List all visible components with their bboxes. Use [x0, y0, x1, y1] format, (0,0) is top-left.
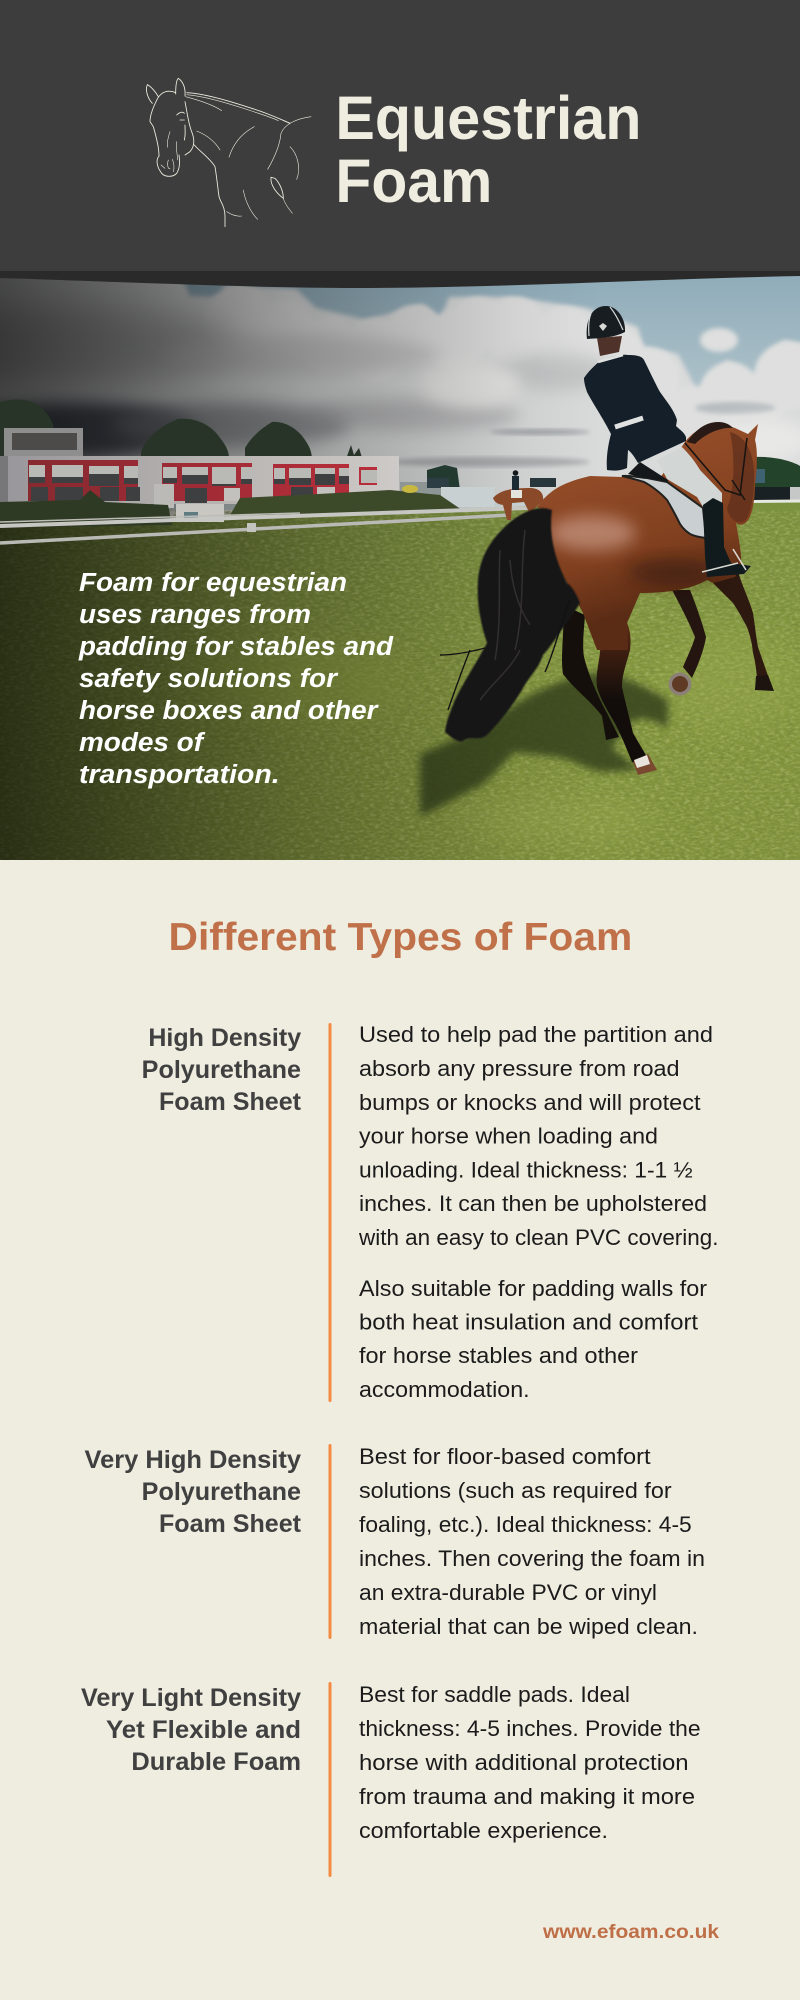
saddle	[628, 462, 668, 482]
belly shading	[628, 558, 716, 586]
description: Best for floor-based comfort	[359, 1444, 651, 1469]
label	[84, 1446, 302, 1538]
divider bar	[328, 1023, 332, 1402]
hoof	[633, 754, 657, 775]
description: both heat insulation and comfort	[359, 1310, 698, 1334]
title	[335, 84, 641, 215]
red and white building	[0, 428, 399, 508]
stirrup	[702, 549, 746, 572]
description: comfortable experience.	[359, 1818, 608, 1843]
description	[358, 1022, 718, 1402]
description: for horse stables and other	[359, 1343, 638, 1368]
grass light and dark patches	[242, 645, 784, 838]
hedges and shrubs	[0, 485, 462, 528]
horse body	[537, 424, 758, 650]
panel: high density polyurethane foam sheet	[142, 1022, 718, 1402]
intro text over photo: transportation.	[79, 761, 280, 789]
description: from trauma and making it more	[359, 1784, 695, 1809]
panel: very high density polyurethane foam sheet	[84, 1444, 705, 1639]
description: thickness: 4-5 inches. Provide the	[359, 1716, 701, 1741]
far front leg	[668, 590, 706, 696]
neck and hair	[597, 336, 622, 356]
riding helmet	[587, 306, 625, 339]
jacket collar and belt	[598, 355, 623, 362]
riding jacket	[584, 355, 686, 471]
label: Foam Sheet	[159, 1088, 302, 1116]
divider bar	[328, 1444, 332, 1639]
fences	[0, 501, 800, 543]
hero photo: rider on horse in a dressage arena	[0, 262, 800, 860]
bridle and reins	[685, 438, 747, 500]
label: Polyurethane	[142, 1056, 301, 1084]
label	[81, 1684, 301, 1776]
near front leg	[713, 574, 768, 690]
description: Also suitable for padding walls for	[359, 1276, 707, 1301]
intro text over photo	[78, 569, 395, 789]
distant rider	[493, 470, 543, 520]
dark gradient overlay	[0, 278, 539, 860]
horse shadow	[420, 672, 668, 816]
intro text over photo: safety solutions for	[79, 665, 339, 693]
divider bar	[328, 1682, 332, 1877]
background trees	[0, 400, 800, 490]
description: horse with additional protection	[359, 1750, 689, 1775]
intro text over photo: modes of	[79, 729, 206, 757]
near hind leg	[596, 618, 646, 763]
intro text over photo: uses ranges from	[79, 601, 311, 629]
far hind leg	[562, 605, 619, 740]
description: absorb any pressure from road	[359, 1056, 680, 1081]
description	[359, 1682, 701, 1843]
description: accommodation.	[359, 1377, 530, 1402]
footer website link: www.efoam.co.uk	[542, 1921, 719, 1943]
intro text over photo: Foam for equestrian	[79, 569, 347, 597]
label: Polyurethane	[142, 1478, 301, 1506]
breeches	[657, 447, 722, 507]
intro text over photo: padding for stables and	[78, 633, 395, 661]
description: your horse when loading and	[359, 1124, 658, 1148]
description: inches. It can then be upholstered	[359, 1191, 707, 1216]
description: bumps or knocks and will protect	[359, 1090, 701, 1115]
description: unloading. Ideal thickness: 1-1 ½	[359, 1158, 693, 1182]
saddle pad	[622, 476, 706, 538]
title: Foam	[335, 147, 492, 215]
description: with an easy to clean PVC covering.	[358, 1225, 718, 1250]
label: Very Light Density	[81, 1684, 301, 1712]
icon: horse line drawing	[146, 78, 311, 227]
description	[359, 1444, 705, 1639]
description: solutions (such as required for	[359, 1478, 672, 1503]
curved shadow strip	[0, 270, 800, 288]
description: Best for saddle pads. Ideal	[359, 1682, 630, 1707]
description: foaling, etc.). Ideal thickness: 4-5	[359, 1512, 692, 1537]
label: Durable Foam	[131, 1748, 301, 1776]
heading: Different Types of Foam: Different Types of Foam	[168, 916, 632, 959]
horse head shading	[727, 432, 754, 522]
horse tail	[440, 508, 580, 741]
clouds	[0, 262, 800, 500]
title: Equestrian	[335, 84, 641, 152]
label: Foam Sheet	[159, 1510, 302, 1538]
description: inches. Then covering the foam in	[359, 1546, 705, 1571]
mane	[687, 422, 733, 444]
header band	[0, 0, 800, 288]
rump highlight	[548, 515, 636, 551]
horse and rider	[440, 306, 774, 775]
description: an extra-durable PVC or vinyl	[359, 1580, 657, 1605]
description: material that can be wiped clean.	[359, 1614, 698, 1639]
riding boot	[703, 498, 751, 577]
intro text over photo: horse boxes and other	[79, 697, 380, 725]
description: Used to help pad the partition and	[359, 1022, 713, 1047]
label	[142, 1024, 302, 1116]
label: High Density	[148, 1024, 301, 1052]
label: Yet Flexible and	[106, 1716, 301, 1744]
panel: very light density foam	[81, 1682, 701, 1877]
sky	[153, 276, 800, 510]
grass texture	[0, 510, 800, 860]
distant buildings and cars	[400, 469, 800, 507]
label: Very High Density	[84, 1446, 301, 1474]
grass field	[0, 498, 800, 860]
